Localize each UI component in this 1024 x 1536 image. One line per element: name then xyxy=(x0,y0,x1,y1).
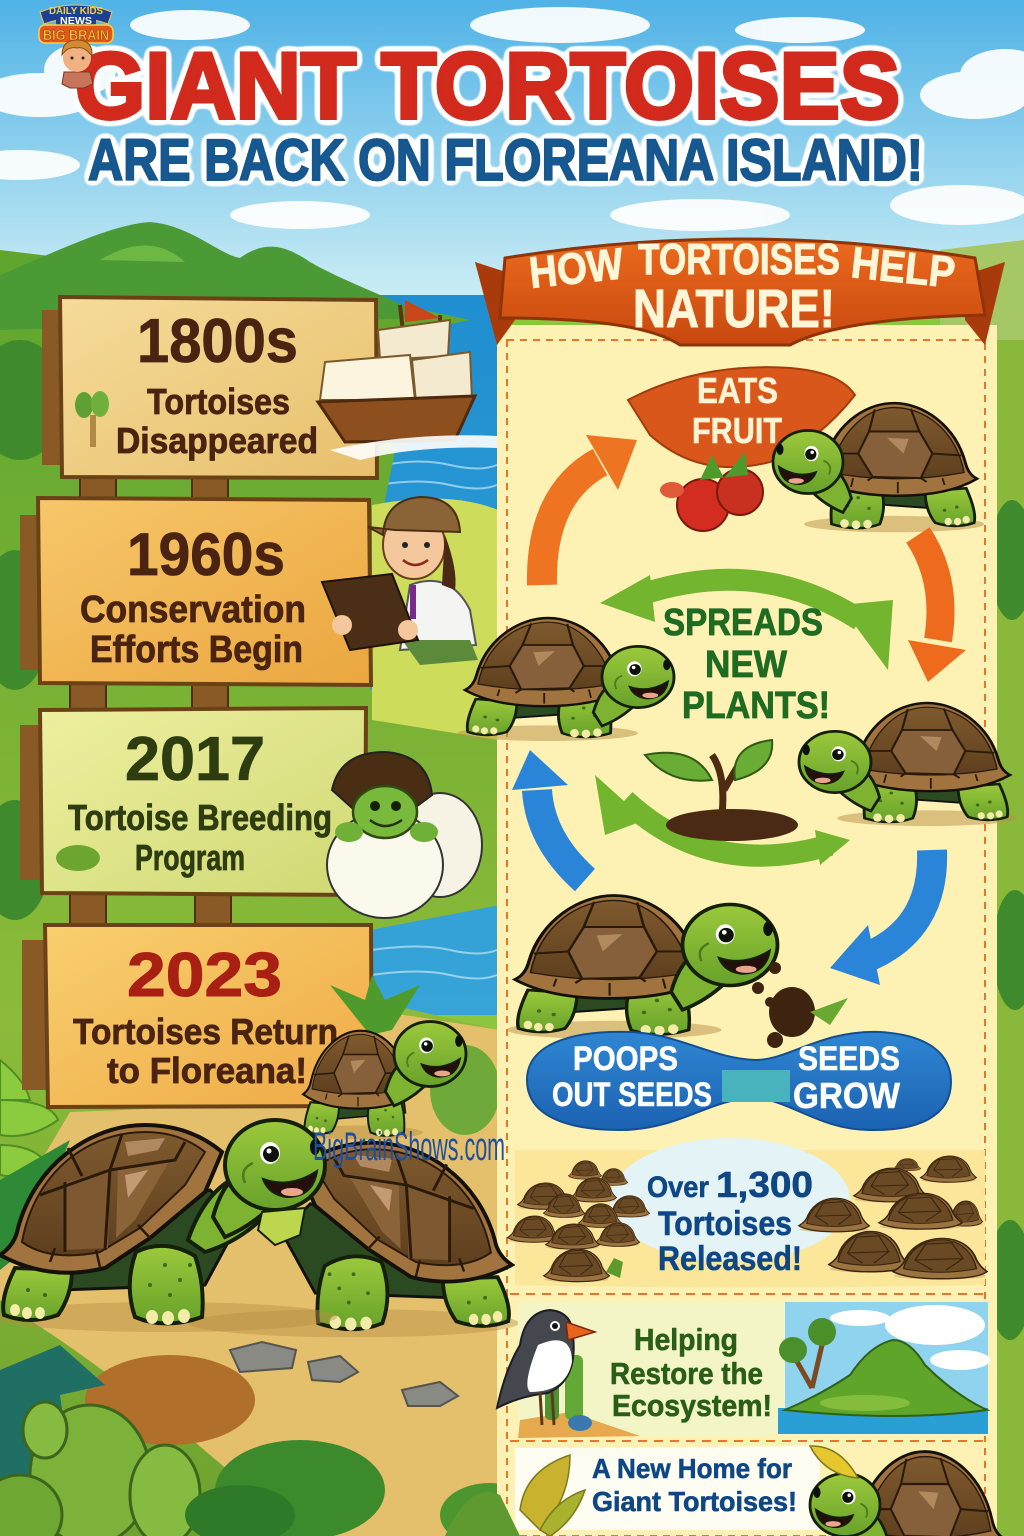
panel: a new home: A New Home for xyxy=(592,1453,792,1484)
panel: helping restore the ecosystem xyxy=(497,1302,990,1441)
label: poops out seeds / seeds grow xyxy=(527,1032,951,1130)
logo: NEWS xyxy=(60,16,92,27)
large tortoise: left xyxy=(0,1120,337,1332)
cactus and foliage bottom-left xyxy=(0,1345,540,1536)
panel: over 1,300 released: Tortoises xyxy=(658,1205,792,1243)
right panel xyxy=(497,325,997,1536)
banner: how tortoises help nature: HOW xyxy=(527,239,626,298)
icon: scientist with clipboard xyxy=(322,497,478,665)
tortoise: walking left side xyxy=(458,618,674,741)
label: spreads new plants: PLANTS! xyxy=(682,685,830,727)
icon: droppings and seedling xyxy=(752,962,848,1048)
background: sky xyxy=(0,0,1024,300)
sign: 2023: 2023 xyxy=(127,941,282,1010)
label: eats fruit: FRUIT xyxy=(692,410,782,451)
logo xyxy=(39,5,113,88)
label: poops out seeds / seeds grow: POOPS xyxy=(573,1040,678,1078)
sign: 2017: Tortoise Breeding xyxy=(68,797,332,838)
small tortoise head xyxy=(606,1258,623,1278)
icon: leaf xyxy=(56,845,100,871)
background: land xyxy=(0,250,500,1536)
icon: hatching egg xyxy=(327,752,482,918)
chest plate xyxy=(258,1208,305,1245)
panel: over 1,300 released: Over xyxy=(647,1171,709,1204)
background: dark leaves left xyxy=(0,1140,70,1270)
watermark: BigBrainShows.com xyxy=(313,1125,505,1169)
banner: how tortoises help nature xyxy=(475,235,1005,345)
icon: bird on cactus xyxy=(497,1310,595,1431)
plant behind small tortoise xyxy=(330,975,420,1035)
banner: how tortoises help nature: NATURE! xyxy=(633,279,835,339)
tortoise: new home xyxy=(810,1446,1010,1536)
background: foliage bushes xyxy=(0,340,1024,1340)
icon: sapling xyxy=(75,391,109,447)
banner: how tortoises help nature: HELP xyxy=(849,238,958,298)
background: grass patch by sign xyxy=(430,1045,500,1135)
decorative orange boulder xyxy=(85,1355,255,1445)
sign: 2017 xyxy=(20,708,366,895)
panel: over 1,300 released xyxy=(508,1138,987,1294)
label: eats fruit: EATS xyxy=(697,370,778,411)
arrow: orange up right xyxy=(542,435,637,585)
tortoise group: right xyxy=(799,1156,987,1279)
icon: palm leaves xyxy=(445,1455,585,1536)
large tortoise: right xyxy=(188,1143,519,1337)
icon: sprout in soil xyxy=(645,740,798,841)
label: eats fruit xyxy=(628,367,855,467)
title xyxy=(75,33,923,193)
sign: 1960s xyxy=(20,498,371,685)
logo: BIG BRAIN xyxy=(43,27,109,44)
sign: 1960s: Efforts Begin xyxy=(90,629,303,671)
sign: 2017: 2017 xyxy=(125,725,265,794)
rocks xyxy=(230,1342,458,1406)
label: poops out seeds / seeds grow: SEEDS xyxy=(798,1040,900,1078)
sign: 2023: Tortoises Return xyxy=(73,1011,338,1052)
label: spreads new plants: NEW xyxy=(705,644,787,686)
tortoise: pooping seeds xyxy=(506,896,778,1039)
label: poops out seeds / seeds grow: OUT SEEDS xyxy=(552,1076,712,1114)
sign: 1800s: 1800s xyxy=(137,307,298,376)
sign: 2023: to Floreana! xyxy=(107,1050,307,1091)
tortoise group: left xyxy=(508,1161,650,1282)
sign: 1800s xyxy=(42,297,377,478)
panel: a new home xyxy=(445,1446,820,1536)
sign: 1800s: Tortoises xyxy=(147,381,290,422)
label: poops out seeds / seeds grow: GROW xyxy=(793,1075,900,1116)
label: spreads new plants xyxy=(663,602,830,727)
logo: DAILY KIDS xyxy=(49,6,103,17)
clouds xyxy=(0,7,1024,231)
sign: 2017: Program xyxy=(135,837,245,878)
background: distant right land xyxy=(940,240,1024,340)
icon: yellow leaf xyxy=(810,1446,858,1478)
panel: helping restore the ecosystem: Restore the xyxy=(610,1356,763,1391)
icon: tomatoes xyxy=(660,452,763,531)
clouds in panel xyxy=(830,1305,990,1370)
background: bright leaves left xyxy=(0,1060,58,1176)
arrow: blue up xyxy=(512,750,585,880)
background: sandy ground xyxy=(0,1010,500,1536)
arrow: orange down xyxy=(908,535,966,682)
panel: helping restore the ecosystem: Ecosystem! xyxy=(612,1388,772,1423)
icon: boy mascot xyxy=(62,40,93,88)
panel: over 1,300 released: 1,300 xyxy=(716,1164,813,1205)
banner: how tortoises help nature: TORTOISES xyxy=(638,235,840,284)
long neck xyxy=(188,1175,275,1252)
sign: 2023 xyxy=(22,925,372,1107)
sign post columns xyxy=(70,478,231,928)
panel: a new home: Giant Tortoises! xyxy=(592,1486,797,1517)
background: coastal strip right of scientist xyxy=(372,499,498,740)
label: spreads new plants: SPREADS xyxy=(663,602,823,644)
arrow: blue down left xyxy=(830,850,932,985)
hills xyxy=(0,222,425,330)
sign: 1960s: 1960s xyxy=(127,521,285,588)
panel: over 1,300 released: Released! xyxy=(658,1240,802,1278)
panel: helping restore the ecosystem: Helping xyxy=(634,1322,738,1357)
title: GIANT TORTOISES xyxy=(75,33,900,138)
tortoise: returning to Floreana xyxy=(298,1022,466,1139)
arrow: green top xyxy=(600,575,893,670)
icon: island xyxy=(779,1318,987,1416)
sign: 1960s: Conservation xyxy=(80,589,306,631)
background: right foliage xyxy=(995,320,1024,1536)
background: sea xyxy=(340,295,510,1015)
tortoise: right side xyxy=(799,703,1017,826)
icon: sailing ship xyxy=(318,300,497,460)
tortoise: eating fruit xyxy=(773,403,984,532)
arrow: green bottom xyxy=(595,775,850,865)
sign: 1800s: Disappeared xyxy=(116,420,318,461)
background: sea waves xyxy=(372,462,497,978)
